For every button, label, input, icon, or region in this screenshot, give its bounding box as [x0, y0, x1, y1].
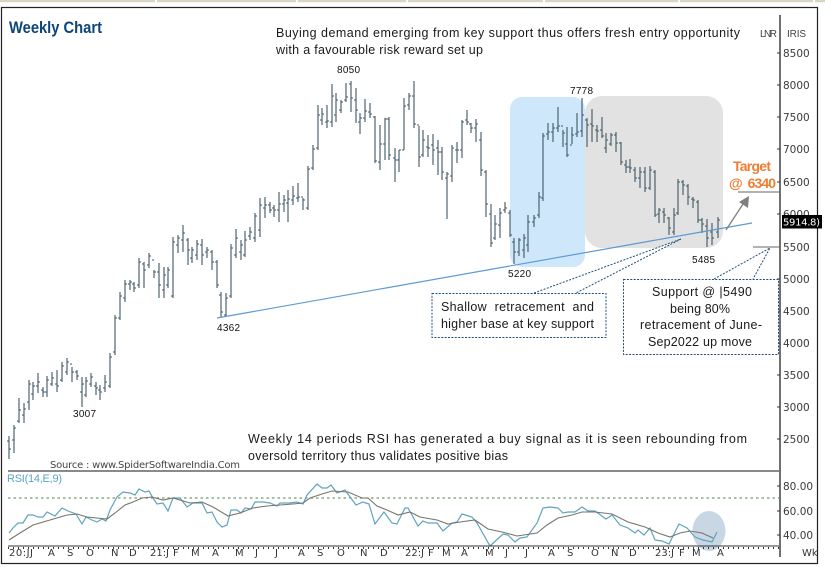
commentary: buying demand: with a favourable risk reward set up	[275, 43, 483, 57]
RSI legend: RSI(14,E,9)	[7, 473, 62, 485]
time axis: N	[111, 548, 118, 559]
price axis: IRIS	[787, 29, 806, 40]
time axis: A	[461, 548, 468, 559]
RSI line	[9, 484, 717, 546]
callout: shallow retracement	[432, 239, 681, 338]
time axis: M	[235, 548, 244, 559]
time axis: 21:J	[150, 548, 169, 559]
time axis: 23:J	[655, 548, 674, 559]
price axis: 6000	[783, 209, 810, 221]
commentary: RSI signal	[248, 432, 747, 463]
price axis: LNR	[760, 29, 777, 40]
swing labels	[73, 65, 715, 420]
price axis: 5500	[783, 242, 810, 254]
price axis: 2500	[783, 434, 810, 446]
highlight: grey correction zone	[585, 96, 723, 248]
time axis: S	[317, 548, 323, 559]
target label	[729, 158, 776, 191]
callout: support at 5490	[624, 248, 778, 354]
commentary: buying demand: Buying demand emerging from key support thus offers fresh entry opportunity	[276, 26, 741, 40]
RSI signal line	[9, 491, 713, 540]
RSI axis labels: 40.00	[783, 530, 813, 542]
RSI axis labels	[777, 481, 813, 542]
RSI axis labels: 80.00	[783, 481, 813, 493]
time axis: N	[611, 548, 618, 559]
price axis: 6500	[783, 177, 810, 189]
highlight: blue buying zone	[510, 97, 585, 267]
time axis: N	[360, 548, 367, 559]
price axis: 7000	[783, 144, 810, 156]
price axis: 3500	[783, 370, 810, 382]
commentary: RSI signal: Weekly 14 periods RSI has generated a buy signal as it is seen rebounding from	[248, 432, 747, 446]
price axis	[760, 15, 810, 557]
time axis: 20:JJ	[9, 548, 33, 559]
commentary: RSI signal: oversold territory thus validates positive bias	[248, 449, 508, 463]
time axis: A	[298, 548, 305, 559]
swing labels: 5220	[508, 269, 531, 280]
price bars	[7, 81, 720, 459]
time axis: O	[337, 548, 345, 559]
source note: Source : www.SpiderSoftwareIndia.Com	[50, 460, 240, 471]
swing labels: 4362	[217, 323, 240, 334]
swing labels: 7778	[570, 86, 593, 97]
time axis: F	[428, 548, 434, 559]
time axis: M	[191, 548, 200, 559]
price axis: 4500	[783, 306, 810, 318]
time axis: Wk	[802, 548, 818, 559]
time axis	[8, 546, 818, 559]
target level line	[738, 191, 780, 193]
target label: Target	[733, 158, 771, 174]
price axis: 8000	[783, 80, 810, 92]
callout: support at 5490: being 80%	[670, 302, 730, 316]
time axis: A	[548, 548, 555, 559]
time axis: O	[86, 548, 94, 559]
callout: support at 5490: retracement of June-	[640, 318, 762, 332]
time axis: J	[274, 548, 278, 559]
callout: shallow retracement: higher base at key support	[441, 317, 595, 331]
last price tag: 5914.8)	[783, 218, 820, 228]
price axis: 8500	[783, 48, 810, 60]
target label: @ 6340	[729, 175, 776, 191]
time axis: M	[442, 548, 451, 559]
time axis: D	[380, 548, 388, 559]
time axis: O	[591, 548, 599, 559]
callout: support at 5490: Sep2022 up move	[648, 335, 752, 349]
trendline: rising support	[217, 223, 752, 318]
time axis: J	[524, 548, 528, 559]
swing labels: 8050	[337, 65, 360, 76]
commentary: buying demand	[275, 26, 741, 57]
time axis: A	[717, 548, 724, 559]
RSI panel	[7, 473, 813, 551]
time axis: A	[48, 548, 55, 559]
time axis: D	[629, 548, 637, 559]
price axis: 3000	[783, 402, 810, 414]
time axis: M	[485, 548, 494, 559]
arrow to target	[726, 196, 749, 230]
price axis: 5000	[783, 274, 810, 286]
time axis: F	[679, 548, 685, 559]
RSI axis labels: 60.00	[783, 506, 813, 518]
support level line	[753, 246, 780, 248]
time axis: J	[254, 548, 258, 559]
callout: support at 5490: Support @ |5490	[652, 285, 752, 299]
price axis: 7500	[783, 112, 810, 124]
time axis: J	[504, 548, 508, 559]
callout: shallow retracement: Shallow retracement and	[441, 300, 594, 314]
time axis: 22:J	[405, 548, 424, 559]
time axis: M	[692, 548, 701, 559]
time axis: F	[173, 548, 179, 559]
highlight: RSI rebound ellipse	[692, 511, 726, 551]
title: Weekly Chart	[9, 18, 102, 37]
price axis: 4000	[783, 338, 810, 350]
time axis: S	[67, 548, 73, 559]
swing labels: 3007	[73, 409, 96, 420]
time axis: D	[129, 548, 137, 559]
time axis: S	[567, 548, 573, 559]
swing labels: 5485	[692, 255, 715, 266]
time axis: A	[212, 548, 219, 559]
